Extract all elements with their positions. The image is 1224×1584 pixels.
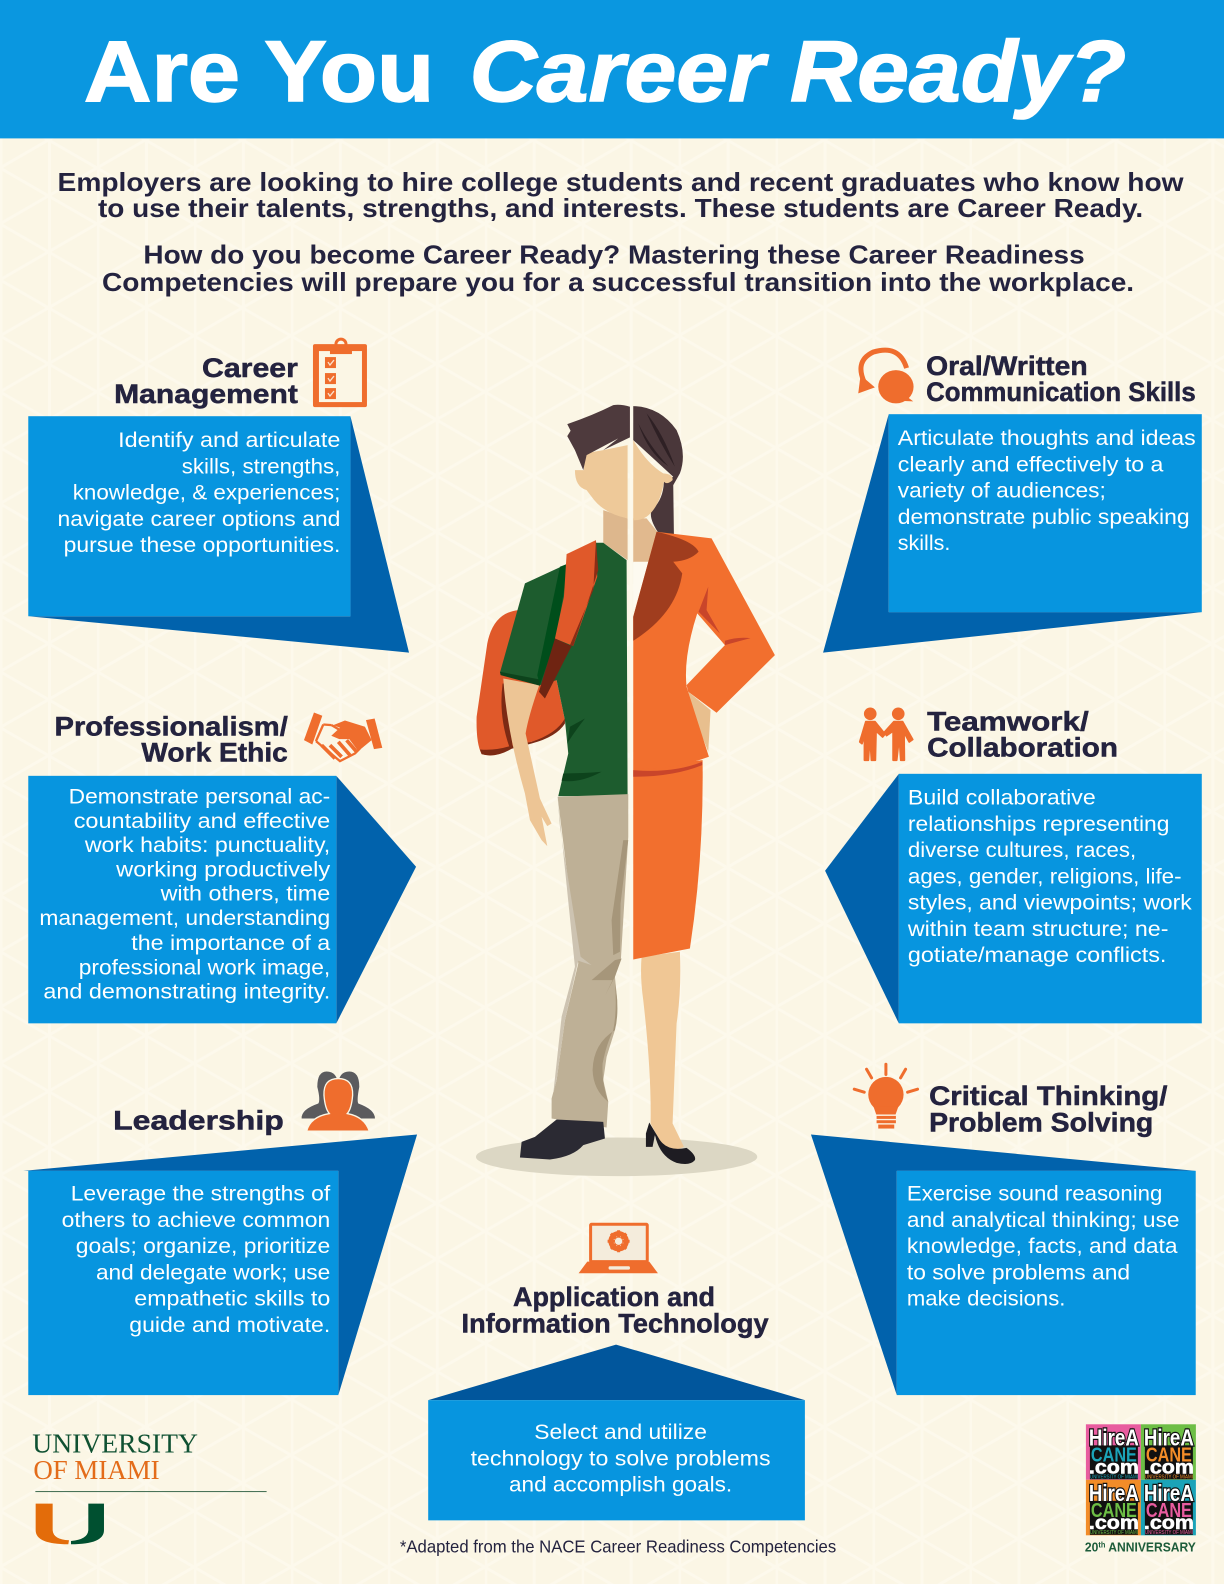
- heading: oral written communication: [926, 350, 1196, 407]
- heading: professionalism: [55, 710, 288, 768]
- female hair: [633, 406, 683, 535]
- tile: green: CANE: [1146, 1444, 1192, 1466]
- wordmark: [32, 1429, 198, 1485]
- box: leadership: others to achieve common: [62, 1209, 330, 1232]
- anniversary label: th: [1098, 1540, 1105, 1549]
- tile: teal: HireA: [1144, 1480, 1194, 1506]
- tile: teal: UNIVERSITY OF MIAMI: [1145, 1530, 1193, 1536]
- box: career management: skills, strengths,: [182, 455, 340, 478]
- intro text: to use their talents, strengths, and interests. These students are Career Ready.: [98, 193, 1143, 223]
- heading: teamwork: Teamwork/: [927, 705, 1089, 736]
- heading: professionalism: Work Ethic: [141, 737, 288, 768]
- box: professionalism: countability and effective: [74, 810, 330, 833]
- title: [84, 24, 1126, 120]
- khaki trousers: [552, 794, 628, 1127]
- icon: speech bubbles: [858, 350, 914, 403]
- box: application and information technology: [428, 1345, 805, 1520]
- heading: critical thinking: Critical Thinking/: [929, 1080, 1168, 1111]
- tile: green: HireA: [1144, 1424, 1194, 1450]
- heading: application and information technology: Application and: [513, 1281, 715, 1312]
- heading: application and information technology: [462, 1281, 769, 1338]
- box: professionalism: professional work image,: [79, 956, 330, 979]
- tile: orange: UNIVERSITY OF MIAMI: [1090, 1530, 1138, 1536]
- male head: [575, 445, 628, 518]
- heading: oral written communication: Oral/Written: [926, 350, 1088, 381]
- heading: professionalism: Professionalism/: [55, 710, 288, 741]
- box: professionalism: work habits: punctuality,: [84, 834, 330, 857]
- icon: clipboard: [313, 339, 367, 407]
- box: leadership: goals; organize, prioritize: [76, 1235, 330, 1258]
- box: teamwork: Build collaborative: [908, 787, 1096, 810]
- icon: leader silhouette: [302, 1072, 375, 1131]
- icon: laptop with gear: [579, 1224, 658, 1273]
- orange skirt: [633, 760, 703, 959]
- footnote: *Adapted from the NACE Career Readiness Competencies: [400, 1537, 836, 1557]
- box: professionalism: and demonstrating integrity.: [43, 981, 330, 1004]
- box: critical thinking: to solve problems and: [907, 1261, 1130, 1284]
- tile: pink: [1086, 1424, 1141, 1480]
- box: oral written communication: clearly and effectively to a: [898, 453, 1164, 476]
- box: teamwork: relationships representing: [908, 813, 1169, 836]
- heading: critical thinking: [929, 1080, 1168, 1137]
- heading: career management: Career: [202, 352, 298, 383]
- heading: critical thinking: Problem Solving: [929, 1106, 1153, 1137]
- tile: orange: .com: [1089, 1513, 1139, 1534]
- tile: pink: HireA: [1089, 1424, 1139, 1450]
- heading: application and information technology: Information Technology: [462, 1307, 769, 1338]
- heading: teamwork: Collaboration: [927, 732, 1118, 763]
- U mark: [36, 1504, 104, 1544]
- box: application and information technology: and accomplish goals.: [509, 1474, 732, 1497]
- icon: light bulb: [854, 1064, 918, 1129]
- box: teamwork: within team structure; ne-: [907, 918, 1168, 941]
- female face: [633, 440, 673, 520]
- tile: orange: CANE: [1091, 1500, 1137, 1522]
- male arm and hand: [503, 678, 552, 846]
- box: career management: [28, 416, 409, 653]
- backpack strap: [539, 540, 598, 698]
- male neck: [603, 510, 628, 560]
- wordmark: UNIVERSITY: [32, 1429, 198, 1459]
- intro text: How do you become Career Ready? Mastering these Career Readiness: [143, 240, 1085, 270]
- panel: application and information technology: [428, 1224, 805, 1520]
- box: professionalism: Demonstrate personal ac-: [69, 786, 330, 809]
- heading: leadership: Leadership: [113, 1104, 284, 1135]
- female leg: [641, 952, 684, 1153]
- box: career management: Identify and articulate: [118, 429, 340, 452]
- male hair: [567, 405, 630, 470]
- backpack: [477, 610, 565, 755]
- box: career management: navigate career options and: [58, 508, 340, 531]
- box: professionalism: [28, 776, 416, 1023]
- central figure: half student, half professional: [476, 405, 775, 1176]
- tile: green: .com: [1144, 1457, 1194, 1478]
- tile: orange: HireA: [1089, 1480, 1139, 1506]
- intro text: Competencies will prepare you for a successful transition into the workplace.: [102, 267, 1134, 297]
- female shoe: [646, 1122, 695, 1164]
- box: professionalism: working productively: [115, 858, 331, 881]
- box: application and information technology: Select and utilize: [534, 1421, 707, 1444]
- intro text: [58, 167, 1184, 297]
- white blouse: [633, 562, 649, 612]
- heading: oral written communication: Communication Skills: [926, 376, 1196, 407]
- anniversary label: ANNIVERSARY: [1105, 1539, 1196, 1554]
- anniversary label: 20: [1085, 1539, 1099, 1554]
- box: oral written communication: [823, 414, 1202, 653]
- box: critical thinking: and analytical thinking; use: [907, 1209, 1180, 1232]
- box: teamwork: ages, gender, religions, life-: [908, 865, 1182, 888]
- box: career management: pursue these opportunities.: [64, 534, 340, 557]
- HireACane logo: [1085, 1424, 1196, 1554]
- tile: teal: .com: [1144, 1513, 1194, 1534]
- tile: teal: CANE: [1146, 1500, 1192, 1522]
- intro text: Employers are looking to hire college students and recent graduates who know how: [58, 167, 1184, 197]
- box: application and information technology: technology to solve problems: [471, 1447, 771, 1470]
- green shirt: [500, 543, 628, 796]
- orange jacket: [633, 532, 775, 769]
- box: critical thinking: [811, 1134, 1196, 1395]
- box: teamwork: [825, 774, 1202, 1023]
- box: critical thinking: Exercise sound reasoning: [907, 1183, 1162, 1206]
- box: leadership: Leverage the strengths of: [71, 1183, 330, 1206]
- heading: career management: [114, 352, 298, 409]
- box: critical thinking: knowledge, facts, and data: [907, 1235, 1178, 1258]
- panel: oral written communication: [823, 350, 1202, 653]
- box: oral written communication: variety of audiences;: [898, 480, 1106, 503]
- hair strands: [638, 413, 675, 467]
- icon: two people shaking hands: [860, 708, 913, 760]
- icon: handshake: [304, 712, 382, 761]
- female neck: [633, 518, 657, 562]
- box: oral written communication: skills.: [898, 532, 950, 555]
- tile: orange: [1086, 1480, 1141, 1536]
- title: Are You: [84, 24, 434, 120]
- tile: green: UNIVERSITY OF MIAMI: [1145, 1474, 1193, 1480]
- title: Career Ready?: [470, 24, 1126, 120]
- heading: teamwork: [927, 705, 1118, 763]
- box: oral written communication: demonstrate public speaking: [898, 506, 1190, 529]
- tile: pink: .com: [1089, 1457, 1139, 1478]
- tile: teal: [1141, 1480, 1196, 1536]
- box: teamwork: diverse cultures, races,: [908, 839, 1136, 862]
- box: teamwork: gotiate/manage conflicts.: [908, 944, 1166, 967]
- tile: pink: CANE: [1091, 1444, 1137, 1466]
- University of Miami logo: [32, 1429, 267, 1544]
- box: professionalism: management, understanding: [39, 907, 330, 930]
- male shoe: [520, 1119, 605, 1159]
- box: critical thinking: make decisions.: [907, 1288, 1065, 1311]
- box: teamwork: styles, and viewpoints; work: [908, 892, 1192, 915]
- box: leadership: empathetic skills to: [134, 1288, 330, 1311]
- box: leadership: [23, 1134, 417, 1395]
- panel: leadership: [23, 1072, 417, 1395]
- tile: pink: UNIVERSITY OF MIAMI: [1090, 1474, 1138, 1480]
- box: leadership: guide and motivate.: [129, 1314, 330, 1337]
- panel: career management: [28, 339, 409, 653]
- female hand: [688, 692, 711, 752]
- box: oral written communication: Articulate thoughts and ideas: [898, 427, 1196, 450]
- heading: career management: Management: [114, 378, 298, 409]
- wordmark: OF MIAMI: [33, 1455, 160, 1485]
- panel: critical thinking: [811, 1064, 1196, 1395]
- panel: teamwork: [825, 705, 1202, 1023]
- box: professionalism: with others, time: [159, 883, 330, 906]
- box: professionalism: the importance of a: [131, 932, 330, 955]
- panel: professionalism: [28, 710, 416, 1023]
- box: leadership: and delegate work; use: [96, 1261, 330, 1284]
- header banner: [0, 0, 1224, 138]
- ground shadow: [476, 1137, 757, 1176]
- tile: green: [1141, 1424, 1196, 1480]
- box: career management: knowledge, & experiences;: [73, 482, 340, 505]
